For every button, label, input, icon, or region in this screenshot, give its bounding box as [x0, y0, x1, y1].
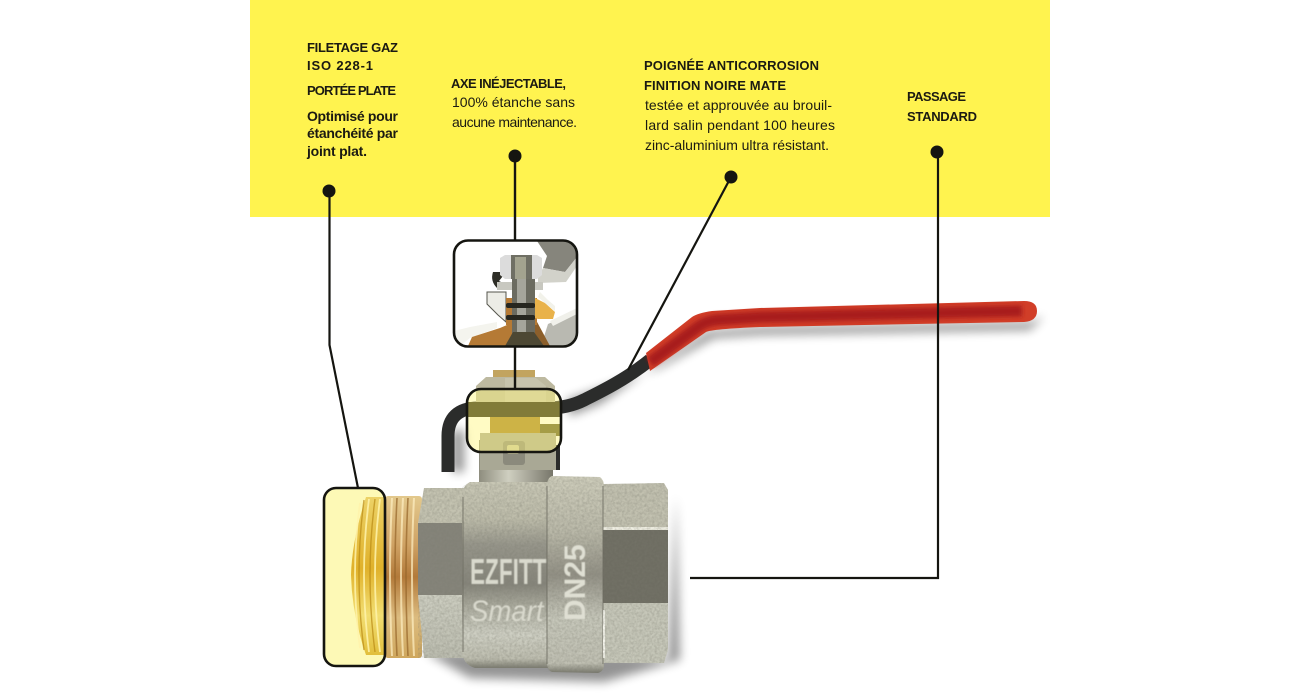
text: flat-seat thread: joint plat. [306, 143, 367, 159]
handle: red grip [646, 301, 1037, 371]
text: non-injectable stem: aucune maintenance. [452, 114, 577, 130]
body engraving: DN25 [559, 544, 592, 621]
body engraving: EZFITT [470, 553, 547, 592]
yellow header band [250, 0, 1050, 217]
brass thread [385, 496, 422, 658]
leader line: stem [508, 150, 522, 389]
text: flat-seat thread [306, 40, 399, 159]
text: non-injectable stem: 100% étanche sans [452, 94, 575, 110]
valve body [418, 476, 668, 673]
text: anti-corrosion handle: testée et approuvée au brouil- [645, 97, 832, 113]
body engraving: Smart [470, 595, 545, 628]
body engraving [470, 544, 592, 628]
text: flat-seat thread: ISO 228-1 [307, 58, 373, 73]
text: anti-corrosion handle: zinc-aluminium ultra résistant. [645, 137, 829, 153]
right hexagon [603, 483, 668, 663]
text: standard bore: STANDARD [907, 109, 977, 124]
leader line: bore [690, 146, 944, 578]
leader line: handle [628, 170, 738, 370]
text: anti-corrosion handle: POIGNÉE ANTICORROSION [644, 58, 819, 73]
seam highlight [603, 610, 605, 658]
collar section [547, 476, 604, 673]
text: anti-corrosion handle: lard salin pendant 100 heures [645, 117, 835, 133]
ball section [462, 482, 548, 668]
left hexagon [418, 488, 464, 658]
inset: stem cutaway [454, 240, 577, 346]
highlight: flat seat thread [324, 488, 396, 666]
highlight: stem area [467, 389, 561, 452]
ball valve [322, 146, 1044, 682]
text: anti-corrosion handle [644, 58, 835, 153]
valve stem and nut [466, 370, 561, 488]
text: flat-seat thread: PORTÉE PLATE [307, 83, 396, 98]
valve shadows [425, 316, 1044, 682]
handle: black section [448, 360, 650, 472]
text: non-injectable stem: AXE INÉJECTABLE, [451, 76, 566, 91]
text: flat-seat thread: étanchéité par [307, 125, 399, 141]
text: flat-seat thread: FILETAGE GAZ [307, 40, 398, 55]
text: standard bore [907, 89, 977, 124]
text: standard bore: PASSAGE [907, 89, 966, 104]
leader line: thread [322, 184, 358, 488]
text: non-injectable stem [451, 76, 577, 130]
text: anti-corrosion handle: FINITION NOIRE MATE [644, 78, 786, 93]
metal grain [418, 476, 668, 673]
text: flat-seat thread: Optimisé pour [307, 108, 399, 124]
body seams [463, 486, 603, 664]
